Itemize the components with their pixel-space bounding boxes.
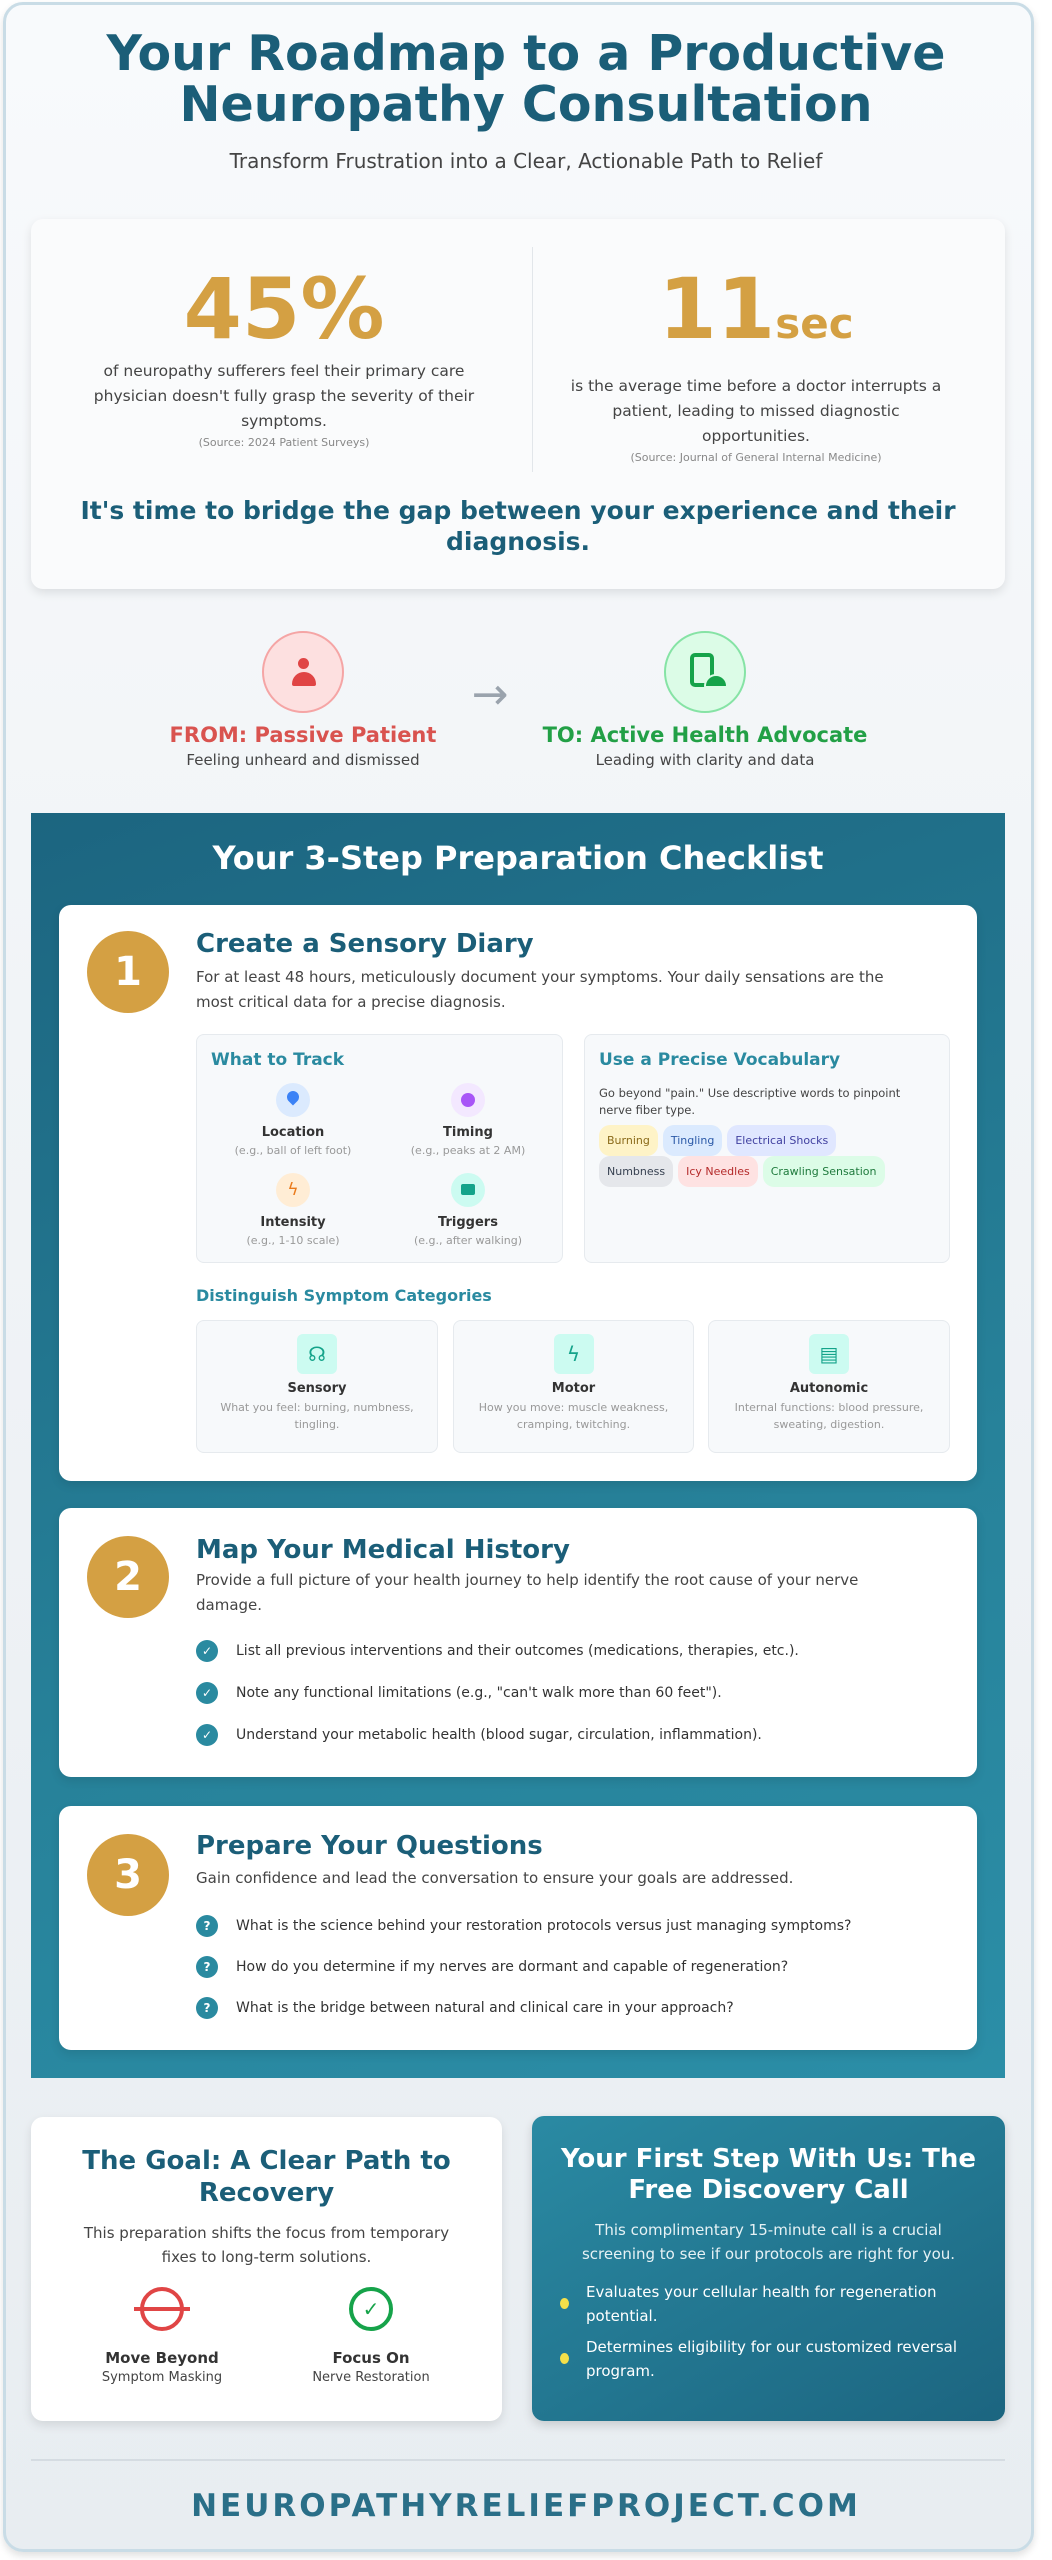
vocabulary tags: Burning bbox=[607, 1134, 650, 1147]
item: triggers bbox=[414, 1173, 522, 1247]
vocabulary tags: Electrical Shocks bbox=[735, 1134, 828, 1147]
box: what to track: What to Track bbox=[211, 1050, 344, 1070]
step 1 card bbox=[59, 905, 977, 1481]
checklist bullets: ✓ bbox=[202, 1686, 212, 1700]
category: autonomic: Internal functions: blood pressure, sweating, digestion. bbox=[735, 1401, 923, 1431]
icon: focus on: Focus On bbox=[332, 2349, 410, 2367]
stat: 11 sec: is the average time before a doctor interrupts a patient, leading to missed diagnostic opportunities. bbox=[571, 377, 941, 445]
category: sensory bbox=[196, 1320, 438, 1453]
number 1 bbox=[87, 931, 169, 1013]
category: autonomic: Autonomic bbox=[790, 1381, 868, 1396]
item: intensity: (e.g., 1-10 scale) bbox=[246, 1234, 340, 1247]
stat: 45%: of neuropathy sufferers feel their primary care physician doesn't fully grasp the severity of their symptoms. bbox=[94, 362, 474, 430]
icon: focus on: Nerve Restoration bbox=[312, 2370, 430, 2385]
vocabulary tags bbox=[599, 1125, 885, 1187]
to: active health advocate: Leading with clarity and data bbox=[596, 751, 814, 769]
item: location bbox=[235, 1083, 351, 1157]
category: motor: How you move: muscle weakness, cramping, twitching. bbox=[479, 1401, 668, 1431]
step 2 card: Map Your Medical History bbox=[196, 1535, 570, 1565]
icon: move beyond: Symptom Masking bbox=[102, 2370, 222, 2385]
checklist bullets bbox=[196, 1640, 799, 1746]
step 2 card: Provide a full picture of your health journey to help identify the root cause of your nerve damage. bbox=[196, 1571, 858, 1614]
stat: 11 sec: (Source: Journal of General Internal Medicine) bbox=[630, 451, 882, 464]
icon: focus on bbox=[312, 2287, 430, 2385]
category: autonomic: ▤ bbox=[820, 1342, 838, 1366]
subtitle: Transform Frustration into a Clear, Actionable Path to Relief bbox=[230, 149, 822, 173]
checklist bullets: Understand your metabolic health (blood sugar, circulation, inflammation). bbox=[236, 1727, 762, 1743]
item: intensity bbox=[246, 1173, 340, 1247]
stat: 45% bbox=[94, 260, 474, 449]
call benefits: Evaluates your cellular health for regeneration potential. bbox=[586, 2283, 937, 2325]
category: sensory: ☊ bbox=[308, 1342, 326, 1366]
category: motor bbox=[453, 1320, 694, 1453]
panel: the goal bbox=[31, 2117, 502, 2421]
category: autonomic bbox=[708, 1320, 950, 1453]
checklist bullets: ✓ bbox=[202, 1644, 212, 1658]
item: timing: Timing bbox=[443, 1125, 493, 1140]
item: location: Location bbox=[262, 1125, 324, 1140]
from: passive patient bbox=[170, 631, 436, 769]
box: precise vocabulary: Use a Precise Vocabulary bbox=[599, 1050, 840, 1070]
call benefits bbox=[560, 2283, 957, 2380]
question bullets: ? bbox=[204, 1919, 210, 1933]
question bullets: What is the science behind your restoration protocols versus just managing symptoms? bbox=[236, 1918, 851, 1934]
number 3 bbox=[87, 1834, 169, 1916]
checklist heading: Your 3-Step Preparation Checklist bbox=[212, 839, 824, 877]
vocabulary tags: Icy Needles bbox=[686, 1165, 750, 1178]
question bullets: How do you determine if my nerves are dormant and capable of regeneration? bbox=[236, 1959, 788, 1975]
bridge statement: It's time to bridge the gap between your experience and their diagnosis. bbox=[80, 496, 956, 556]
panel: free discovery call: This complimentary 15-minute call is a crucial screening to see if our protocols are right for you. bbox=[582, 2221, 955, 2263]
panel: statistics bbox=[31, 219, 1005, 589]
title: Neuropathy Consultation bbox=[179, 76, 872, 133]
category: sensory: Sensory bbox=[288, 1381, 346, 1396]
to: active health advocate bbox=[542, 631, 867, 769]
box: precise vocabulary: Go beyond "pain." Use descriptive words to pinpoint nerve fiber type. bbox=[599, 1086, 900, 1117]
box: what to track bbox=[196, 1034, 563, 1263]
category: motor: ϟ bbox=[567, 1342, 580, 1366]
to: active health advocate: TO: Active Health Advocate bbox=[543, 723, 867, 747]
icon: move beyond: Move Beyond bbox=[105, 2349, 219, 2367]
panel: the goal: The Goal: A Clear Path to Recovery bbox=[82, 2146, 451, 2208]
item: timing: (e.g., peaks at 2 AM) bbox=[411, 1144, 525, 1157]
vocabulary tags: Numbness bbox=[607, 1165, 665, 1178]
step 3 card: Prepare Your Questions bbox=[196, 1831, 543, 1861]
stat: 45%: 45% bbox=[183, 260, 385, 358]
heading: symptom categories: Distinguish Symptom Categories bbox=[196, 1286, 492, 1305]
number 2 bbox=[87, 1536, 169, 1618]
footer url: NEUROPATHYRELIEFPROJECT.COM bbox=[191, 2488, 861, 2524]
item: triggers: (e.g., after walking) bbox=[414, 1234, 522, 1247]
call benefits: Determines eligibility for our customized reversal program. bbox=[586, 2338, 957, 2380]
number 3: 3 bbox=[114, 1852, 142, 1898]
question bullets: ? bbox=[204, 1960, 210, 1974]
checklist bullets: List all previous interventions and their outcomes (medications, therapies, etc.). bbox=[236, 1643, 799, 1659]
step 2 card bbox=[59, 1508, 977, 1777]
title bbox=[106, 25, 945, 133]
vocabulary tags: Crawling Sensation bbox=[771, 1165, 876, 1178]
step 1 description: For at least 48 hours, meticulously document your symptoms. Your daily sensations are the most critical data for a precise diagnosis. bbox=[196, 968, 884, 1011]
question bullets: ? bbox=[204, 2001, 210, 2015]
item: location: (e.g., ball of left foot) bbox=[235, 1144, 351, 1157]
category: sensory: What you feel: burning, numbness, tingling. bbox=[220, 1401, 414, 1431]
panel: free discovery call bbox=[532, 2116, 1005, 2421]
arrow: → bbox=[472, 669, 508, 720]
step 3 card bbox=[59, 1806, 977, 2050]
step 1 heading: Create a Sensory Diary bbox=[196, 929, 534, 959]
item: timing bbox=[411, 1083, 525, 1157]
panel: the goal: This preparation shifts the focus from temporary fixes to long-term solutions. bbox=[84, 2224, 449, 2266]
item: intensity: ϟ bbox=[287, 1180, 299, 1200]
panel: free discovery call: Your First Step With Us: The Free Discovery Call bbox=[561, 2144, 976, 2205]
category: motor: Motor bbox=[552, 1381, 595, 1396]
stat: 11 sec bbox=[571, 260, 941, 464]
question bullets bbox=[196, 1915, 851, 2019]
vocabulary tags: Tingling bbox=[671, 1134, 714, 1147]
stat: 11 sec: 11sec bbox=[658, 260, 854, 358]
icon: move beyond bbox=[102, 2287, 222, 2385]
from: passive patient: FROM: Passive Patient bbox=[170, 723, 436, 747]
icon: person bbox=[262, 631, 344, 713]
from: passive patient: Feeling unheard and dismissed bbox=[186, 751, 420, 769]
item: intensity: Intensity bbox=[260, 1215, 326, 1230]
icon: advocate bbox=[664, 631, 746, 713]
panel: 3-step checklist bbox=[31, 813, 1005, 2078]
box: precise vocabulary bbox=[584, 1034, 950, 1263]
number 2: 2 bbox=[114, 1554, 142, 1600]
stat: 45%: (Source: 2024 Patient Surveys) bbox=[199, 436, 369, 449]
item: triggers: Triggers bbox=[438, 1215, 498, 1230]
step 3 card: Gain confidence and lead the conversation to ensure your goals are addressed. bbox=[196, 1869, 793, 1887]
question bullets: What is the bridge between natural and clinical care in your approach? bbox=[236, 2000, 734, 2016]
title: Your Roadmap to a Productive bbox=[107, 25, 945, 82]
checklist bullets: ✓ bbox=[202, 1728, 212, 1742]
checklist bullets: Note any functional limitations (e.g., "can't walk more than 60 feet"). bbox=[236, 1685, 722, 1701]
icon: focus on: ✓ bbox=[363, 2297, 379, 2321]
number 1: 1 bbox=[114, 949, 142, 995]
